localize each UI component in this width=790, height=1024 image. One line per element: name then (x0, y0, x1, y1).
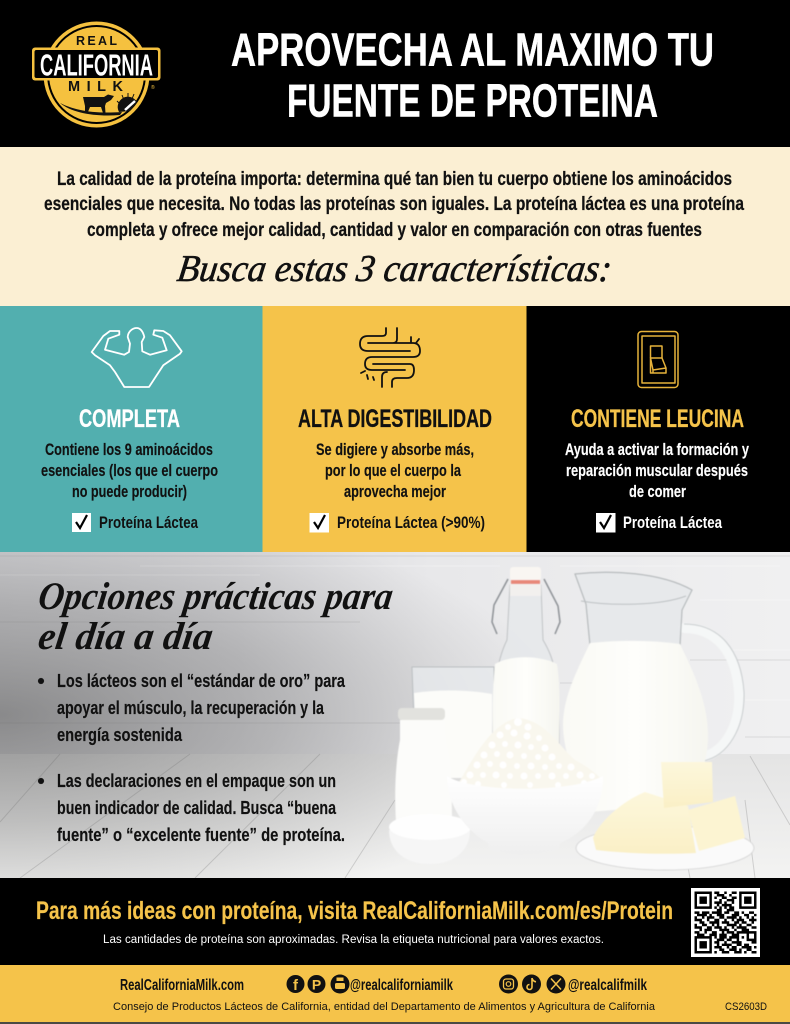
social icons: instagram, tiktok, x (499, 974, 566, 994)
butter (593, 762, 745, 854)
photo: dairy products on a white wooden table (0, 552, 790, 878)
jug handle (684, 628, 739, 757)
glass of milk (412, 667, 494, 778)
logo: Real California Milk: CALIFORNIA (40, 48, 153, 82)
small cup of yogurt (389, 814, 471, 864)
logo: Real California Milk: MILK (68, 79, 124, 95)
panel: intro (0, 147, 790, 306)
bullet: estandar de oro: energía sostenida (57, 724, 183, 745)
header band (0, 0, 790, 147)
checkbox: proteina lactea: Proteína Láctea (623, 514, 723, 532)
social icons: facebook, pinterest, youtube (286, 974, 350, 994)
body text (316, 441, 474, 501)
bullet: declaraciones en el empaque: Las declaraciones en el empaque son un (57, 770, 336, 791)
bullet: estandar de oro: Los lácteos son el “estándar de oro” para (57, 670, 346, 691)
icon: intestines (360, 328, 420, 387)
icon: light switch (638, 332, 678, 388)
title: FUENTE DE PROTEINA (287, 74, 658, 126)
bullet: declaraciones en el empaque: buen indicador de calidad. Busca “buena (57, 797, 337, 818)
heading: alta digestibilidad: ALTA DIGESTIBILIDAD (298, 405, 492, 433)
panel: alta digestibilidad (262, 306, 526, 552)
disclaimer: Las cantidades de proteína son aproximadas. Revisa la etiqueta nutricional para valores exactos. (103, 934, 604, 946)
subheading: Busca estas 3 características: Busca estas 3 características: (175, 248, 615, 290)
heading: opciones practicas: el día a día (36, 615, 216, 658)
panel: opciones practicas (0, 552, 790, 878)
checkbox: proteina lactea (596, 513, 723, 532)
council attribution: Consejo de Productos Lácteos de California, entidad del Departamento de Alimentos y Agricultura de California (113, 1001, 656, 1013)
milk jug (563, 572, 708, 812)
icon: cow and sun (60, 93, 137, 116)
checkbox: proteina lactea (72, 513, 199, 532)
bullet: estandar de oro: apoyar el músculo, la recuperación y la (57, 697, 325, 718)
table (0, 754, 790, 878)
glass bottle (492, 567, 560, 745)
handle: realcaliforniamilk: @realcaliforniamilk (350, 977, 453, 994)
body text: Contiene los 9 aminoácidos (45, 441, 213, 459)
heading: completa: COMPLETA (79, 405, 180, 433)
panel: contiene leucina (526, 306, 790, 552)
cottage cheese (459, 718, 602, 792)
document code: CS2603D (725, 1001, 767, 1013)
logo: Real California Milk: ® (151, 84, 155, 91)
body text (41, 441, 218, 501)
social icons: facebook, pinterest, youtube: P (312, 976, 321, 992)
icon: flexing torso (92, 328, 182, 387)
body text: esenciales (los que el cuerpo (41, 462, 218, 480)
bullet: declaraciones en el empaque (38, 770, 345, 845)
panel: footer (0, 965, 790, 1024)
handle: realcalifmilk: @realcalifmilk (568, 977, 647, 994)
panel: completa (0, 306, 262, 552)
intro text (44, 168, 744, 241)
body text: no puede producir) (72, 483, 187, 501)
white bowl (447, 776, 603, 854)
plate (576, 826, 754, 870)
checkbox: proteina lactea 90: Proteína Láctea (>90%) (337, 514, 485, 532)
panel: call to action (0, 878, 790, 965)
body text: de comer (629, 483, 686, 501)
body text: Se digiere y absorbe más, (316, 441, 474, 459)
logo: Real California Milk (32, 22, 160, 128)
bullet: declaraciones en el empaque: fuente” o “excelente fuente” de proteína. (57, 824, 345, 845)
heading: opciones practicas (36, 575, 396, 658)
body text (565, 441, 750, 501)
social icons: facebook, pinterest, youtube: f (293, 977, 299, 994)
body text: por lo que el cuerpo la (325, 462, 462, 480)
checkbox: proteina lactea 90 (310, 513, 485, 532)
body text: aprovecha mejor (344, 483, 446, 501)
QR code (691, 888, 760, 957)
heading: opciones practicas: Opciones prácticas para (36, 575, 396, 618)
bullet: estandar de oro (38, 670, 346, 745)
title (231, 24, 714, 126)
website: RealCaliforniaMilk.com (120, 977, 244, 994)
logo: Real California Milk: REAL (76, 34, 117, 48)
small milk bottle (395, 708, 452, 822)
checkbox: proteina lactea: Proteína Láctea (99, 514, 199, 532)
